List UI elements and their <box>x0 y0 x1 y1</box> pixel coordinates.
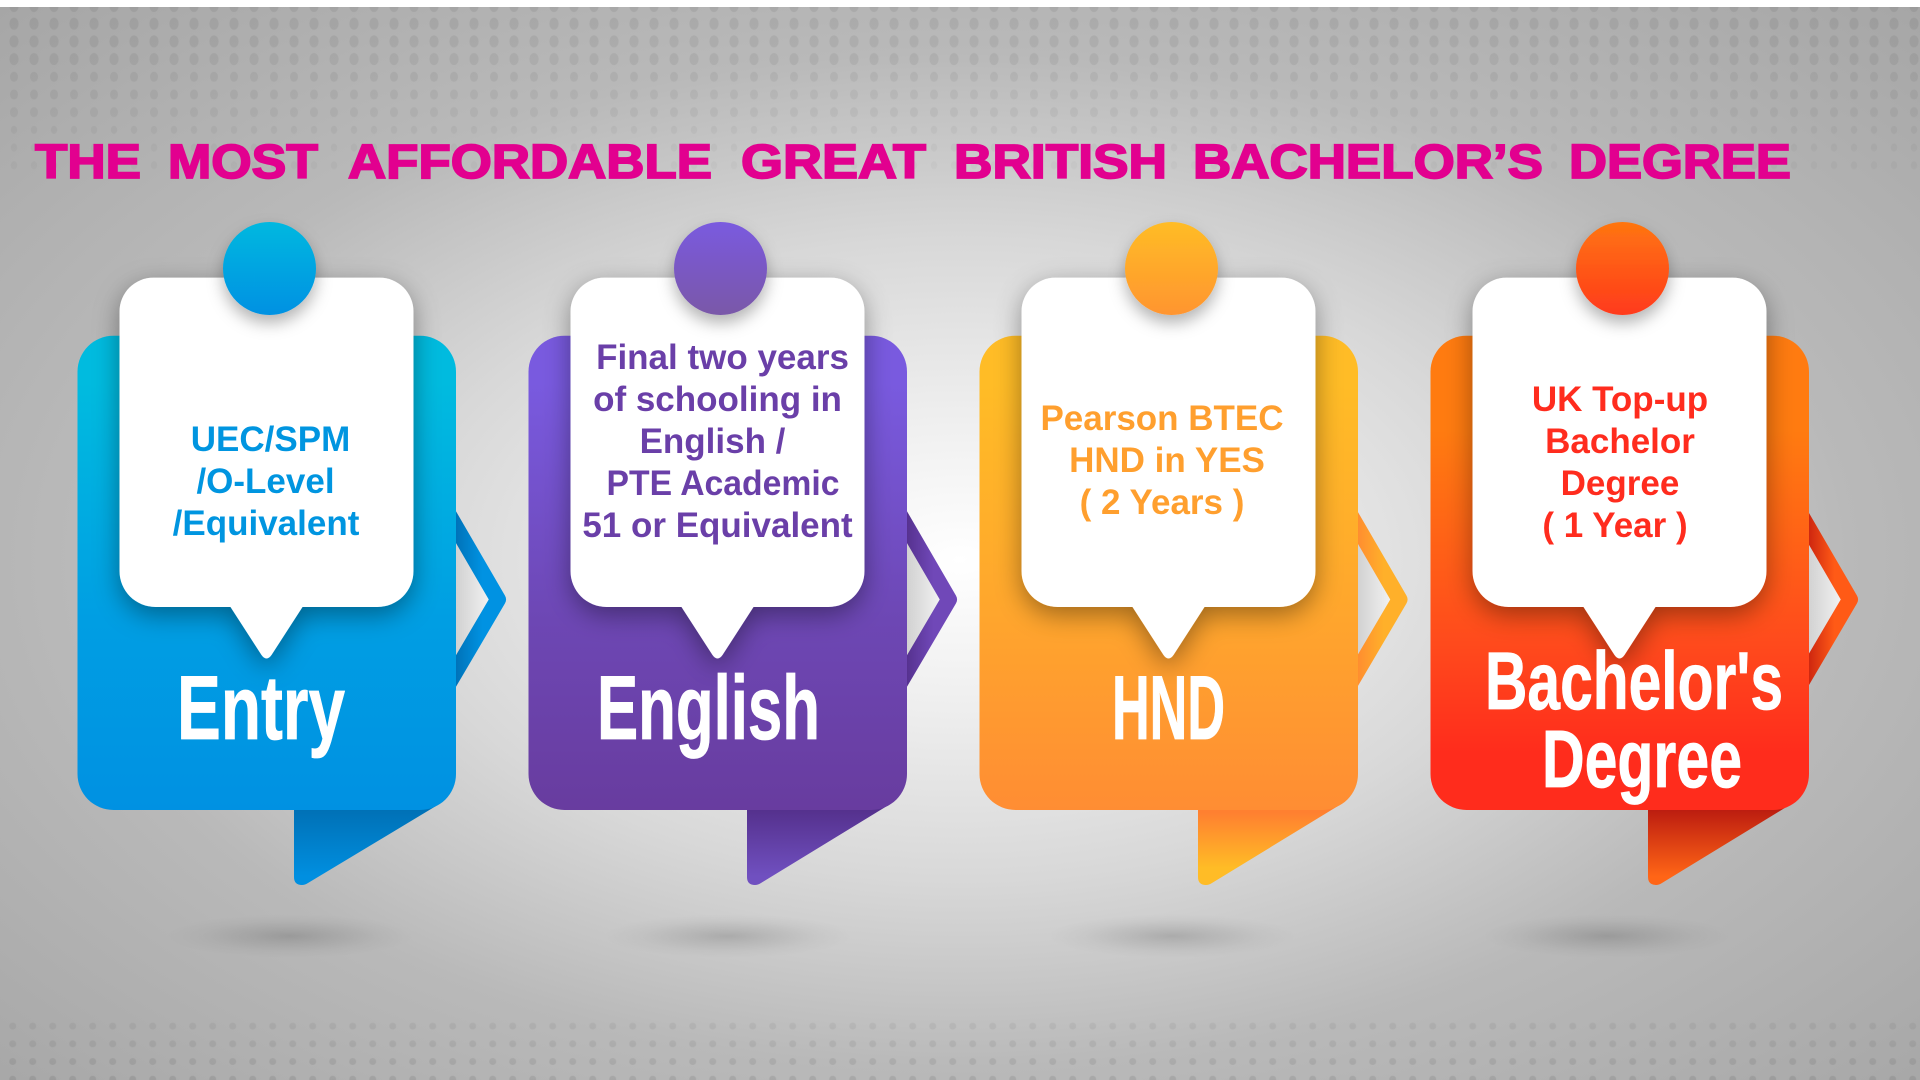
description text: /Equivalent <box>173 504 360 543</box>
white callout <box>120 278 414 658</box>
title: THE <box>35 135 141 189</box>
ground shadow <box>603 914 853 958</box>
white callout <box>570 278 864 658</box>
description text <box>173 420 360 543</box>
tail <box>747 800 887 885</box>
heading: Entry: Entry <box>177 658 345 759</box>
arrow chevron <box>897 510 949 688</box>
heading: Bachelor's Degree <box>1485 636 1783 805</box>
title: BRITISH <box>954 135 1167 189</box>
panel: English <box>528 222 949 958</box>
panel: HND <box>980 222 1400 958</box>
description text: PTE Academic <box>606 464 840 503</box>
heading: HND: HND <box>1112 658 1225 759</box>
ground shadow <box>1482 914 1732 958</box>
title: BACHELOR’S <box>1193 135 1543 189</box>
circle <box>223 222 316 315</box>
heading: English: English <box>597 658 820 759</box>
circle <box>1576 222 1669 315</box>
description text: Final two years <box>596 338 849 377</box>
panel: Bachelor's Degree <box>1430 222 1850 958</box>
tail <box>1648 800 1788 885</box>
description text <box>582 338 853 545</box>
card body <box>980 336 1358 810</box>
arrow chevron <box>446 510 498 688</box>
card body <box>1430 336 1809 810</box>
card body <box>78 336 456 810</box>
description text: 51 or Equivalent <box>582 506 853 545</box>
description text: of schooling in <box>593 380 842 419</box>
description text: Bachelor <box>1545 422 1695 461</box>
description text: Degree <box>1561 464 1679 503</box>
description text <box>1532 380 1708 545</box>
description text: HND in YES <box>1069 441 1265 480</box>
tail <box>294 800 436 885</box>
heading: Bachelor's Degree: Bachelor's <box>1485 636 1783 727</box>
arrow chevron <box>1798 510 1850 688</box>
description text: UK Top-up <box>1532 380 1708 419</box>
circle <box>1125 222 1218 315</box>
description text: UEC/SPM <box>191 420 350 459</box>
description text: Pearson BTEC <box>1040 399 1284 438</box>
white callout <box>1472 278 1766 658</box>
tail <box>1198 800 1338 885</box>
circle <box>674 222 767 315</box>
description text: English / <box>640 422 786 461</box>
heading: Bachelor's Degree: Degree <box>1542 714 1742 805</box>
title: AFFORDABLE <box>348 135 712 189</box>
title: GREAT <box>741 135 926 189</box>
description text: /O-Level <box>196 462 335 501</box>
white callout <box>1022 278 1316 658</box>
description text <box>1040 399 1284 522</box>
arrow chevron <box>1348 510 1400 688</box>
card body <box>528 336 907 810</box>
title: DEGREE <box>1569 135 1791 189</box>
title: MOST <box>168 135 318 189</box>
description text: ( 1 Year ) <box>1542 506 1688 545</box>
panel: Entry <box>78 222 498 958</box>
ground shadow <box>165 914 415 958</box>
description text: ( 2 Years ) <box>1080 483 1244 522</box>
title <box>35 135 1791 189</box>
ground shadow <box>1047 914 1297 958</box>
